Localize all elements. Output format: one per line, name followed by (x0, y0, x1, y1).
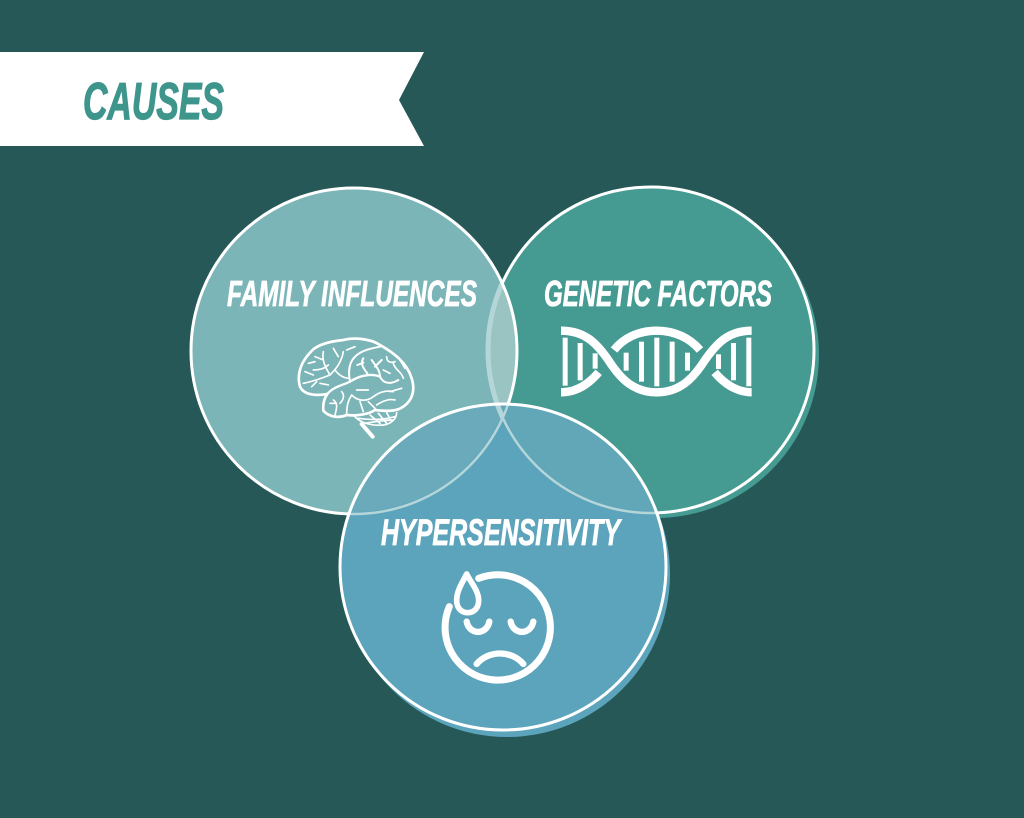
label: family influences: FAMILY INFLUENCES (227, 273, 477, 314)
circle: genetic factors fill (488, 187, 814, 513)
infographic canvas (0, 52, 819, 737)
circle: family influences fill (191, 188, 517, 514)
label: hypersensitivity: HYPERSENSITIVITY (381, 512, 622, 553)
icon: brain (299, 339, 413, 437)
circle shadows (344, 192, 819, 737)
panel: genetic factors (544, 273, 772, 392)
faint outlines within overlaps (350, 282, 656, 516)
panel: hypersensitivity (381, 512, 622, 680)
banner: causes (0, 52, 424, 146)
circle: hypersensitivity fill (340, 404, 666, 730)
icon: dna helix (561, 331, 752, 392)
icon: sad sweating face (445, 574, 550, 680)
label: genetic factors: GENETIC FACTORS (544, 273, 772, 314)
venn diagram (191, 187, 819, 737)
circle outlines (191, 187, 814, 730)
overlap: genetic and hypersensitivity (490, 189, 812, 511)
overlap: family and hypersensitivity (352, 406, 500, 512)
overlap: family and genetic (490, 288, 516, 403)
panel: family influences (227, 273, 477, 437)
heading: causes: CAUSES (83, 73, 224, 131)
